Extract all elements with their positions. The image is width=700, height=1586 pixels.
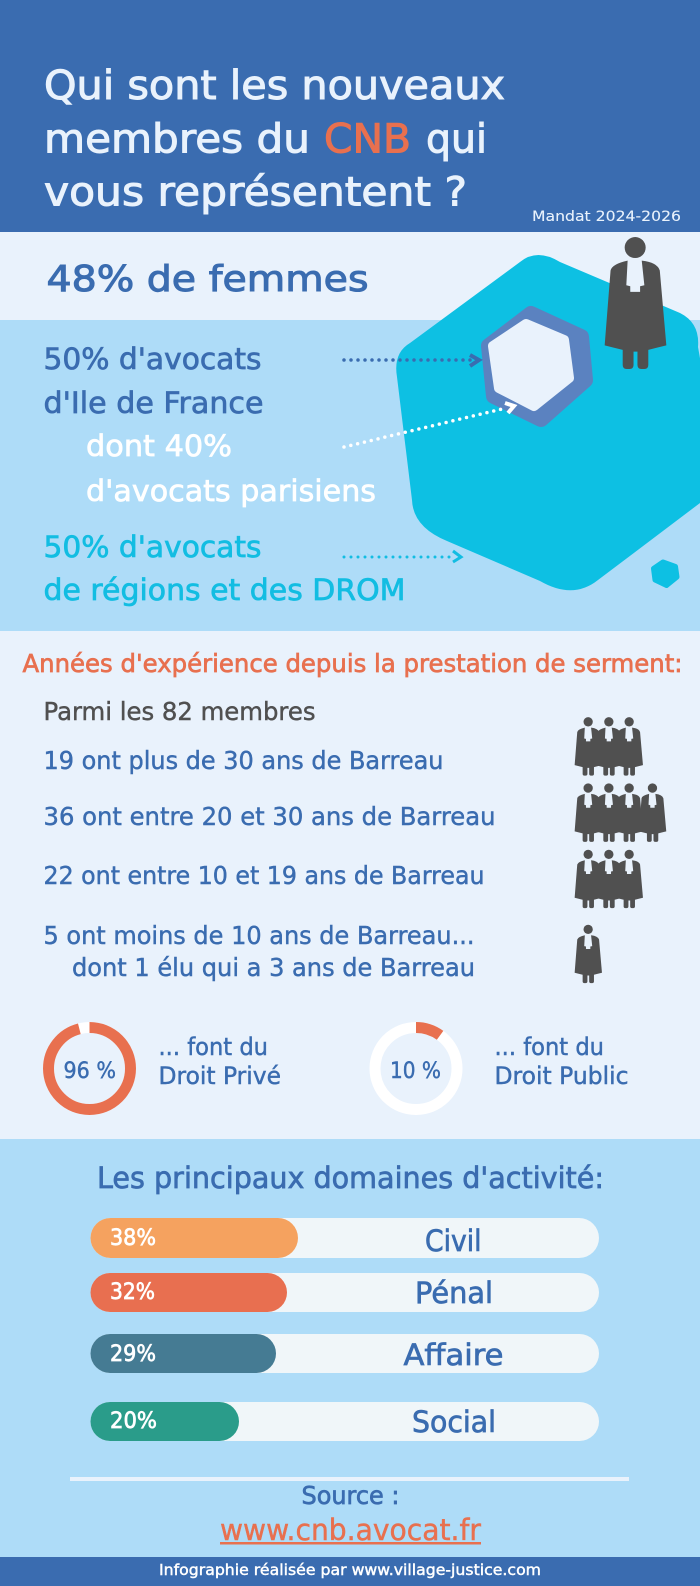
bar: Social 20%: Social bbox=[412, 1405, 496, 1439]
bar: Civil 38% bbox=[90, 1218, 599, 1258]
mandate label: Mandat 2024-2026 bbox=[532, 209, 681, 225]
text: Paris label: d'avocats parisiens bbox=[86, 474, 376, 508]
icons: three figures 10 to 19 years bbox=[575, 850, 643, 908]
heading: main activity domains: Les principaux domaines d'activité: bbox=[97, 1161, 604, 1195]
icon: lawyer figure bbox=[605, 237, 666, 369]
text: credit: Infographie réalisée par www.village-justice.com bbox=[159, 1561, 541, 1579]
icons: three figures over 30 years bbox=[575, 717, 643, 776]
text: Paris share: dont 40% bbox=[86, 429, 232, 463]
text: source label: Source : bbox=[302, 1481, 400, 1510]
row: 10 to 19 years: 22 ont entre 10 et 19 ans de Barreau bbox=[44, 861, 484, 890]
panel: header bbox=[0, 0, 700, 232]
arrow: to Ile de France bbox=[344, 355, 479, 366]
bar: Business 29%: 29% bbox=[110, 1342, 156, 1367]
donut: private law 96%: 96 % bbox=[64, 1059, 116, 1084]
bar: Penal 32%: 32% bbox=[110, 1280, 155, 1305]
panel: footer bbox=[0, 1557, 700, 1586]
icons: four figures 20 to 30 years bbox=[575, 783, 666, 842]
bar: Penal 32% bbox=[90, 1273, 599, 1312]
title bbox=[44, 63, 505, 216]
bar: Civil 38%: Civil bbox=[425, 1224, 482, 1258]
bar: Business 29% bbox=[90, 1334, 599, 1373]
text: private law bbox=[158, 1033, 281, 1090]
hexagon: Ile de France bbox=[489, 314, 585, 419]
title: qui bbox=[426, 116, 487, 162]
bar: Business 29%: Affaire bbox=[404, 1338, 504, 1372]
panel: experience bbox=[0, 631, 700, 1139]
text: public law: Droit Public bbox=[494, 1062, 628, 1090]
donut: public law 10% bbox=[375, 1028, 457, 1110]
title: membres du bbox=[44, 116, 310, 162]
stat: 48% women: 48% de femmes bbox=[46, 259, 368, 300]
title: CNB bbox=[324, 116, 411, 162]
text: regions share: 50% d'avocats bbox=[44, 530, 262, 564]
bar: Social 20% bbox=[90, 1402, 599, 1441]
arrow: to Paris bbox=[344, 403, 514, 447]
bar: Civil 38%: 38% bbox=[110, 1226, 156, 1251]
hexagon: small accent bbox=[654, 562, 677, 586]
row: 20 to 30 years: 36 ont entre 20 et 30 ans de Barreau bbox=[44, 802, 496, 831]
hexagon: regions bbox=[396, 255, 700, 590]
text: public law bbox=[494, 1033, 628, 1090]
title: vous représentent ? bbox=[44, 170, 467, 216]
row: over 30 years: 19 ont plus de 30 ans de Barreau bbox=[44, 746, 444, 775]
text: public law: ... font du bbox=[494, 1033, 604, 1061]
panel: geographic origin bbox=[0, 320, 700, 631]
bar: Penal 32%: Pénal bbox=[415, 1276, 493, 1310]
text: private law: Droit Privé bbox=[158, 1062, 281, 1090]
hexagon: Paris bbox=[493, 324, 569, 406]
arrow: to regions bbox=[344, 551, 461, 562]
panel: activity domains bbox=[0, 1139, 700, 1557]
donut: private law 96% bbox=[48, 1028, 130, 1110]
text: among the 82 members: Parmi les 82 membres bbox=[44, 697, 316, 726]
text: regions label: de régions et des DROM bbox=[44, 573, 405, 607]
panel: women share bbox=[0, 232, 700, 320]
text: Ile de France label: d'Ile de France bbox=[44, 386, 264, 420]
heading: years of experience: Années d'expérience depuis la prestation de serment: bbox=[22, 649, 682, 678]
text: private law: ... font du bbox=[158, 1033, 268, 1061]
chart: hexagon proportions bbox=[396, 255, 700, 590]
text: source link: www.cnb.avocat.fr bbox=[220, 1513, 481, 1547]
icon: one figure under 10 years bbox=[575, 925, 602, 983]
row: under 10 years: 5 ont moins de 10 ans de Barreau... bbox=[44, 921, 474, 950]
title: Qui sont les nouveaux bbox=[44, 63, 505, 109]
text: Ile de France share: 50% d'avocats bbox=[44, 342, 262, 376]
bar: Social 20%: 20% bbox=[110, 1409, 157, 1434]
donut: public law 10%: 10 % bbox=[390, 1059, 441, 1084]
row: youngest elected: dont 1 élu qui a 3 ans de Barreau bbox=[72, 953, 475, 982]
